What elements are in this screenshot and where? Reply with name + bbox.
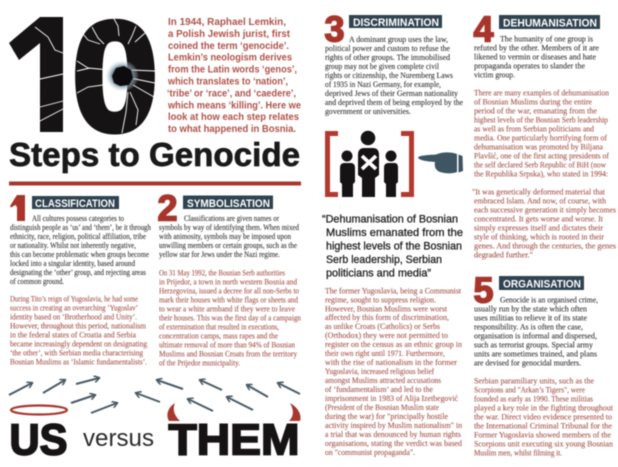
text: Bosnia context: became increasingly dependent on designating	[10, 340, 147, 348]
text: Bosnia context: Scorpions and "Arkan’s Tigers", were	[474, 385, 585, 394]
text: definition: group may not be given complete civil	[325, 62, 440, 71]
text: Bosnia context: (Orthodox) they were not permitted to	[325, 331, 448, 340]
text: Bosnia context: The former Yugoslavia, being a Communist	[325, 286, 462, 295]
text: Plavšić quote: genes. And through the centuries, the genes	[474, 241, 616, 250]
text: Plavšić quote: degraded further."	[474, 250, 533, 259]
text: Bosnia examples: the Republika Srpska), who stated in 1994:	[474, 169, 608, 178]
text: Plavšić quote: style of thinking, which is rooted in their	[474, 232, 604, 241]
intro paragraph: look at how each step relates	[168, 112, 299, 123]
big number 10 with cracks	[8, 16, 156, 136]
text: definition	[474, 295, 598, 367]
text: definition: Genocide is an organised crime,	[500, 295, 598, 304]
text: Bosnia context: success in creating an overarching ‘Yugoslav’	[10, 304, 138, 312]
text: definition: political power and custom to refuse the	[325, 44, 450, 53]
text: definition: unwilling members or certain groups, such as the	[159, 241, 297, 250]
text: Bosnia context: However, Bosnian Muslims were worst	[325, 304, 448, 313]
text: Bosnia examples: as well as from Serbian politicians and	[474, 125, 594, 134]
text: Bosnia examples: media. One particularly horrifying form of	[474, 134, 607, 143]
intro paragraph	[167, 17, 301, 135]
text: Bosnia context: of ‘fundamentalism’ and led to the	[325, 385, 433, 394]
text: definition	[474, 35, 599, 80]
text: Bosnia context: During Tito’s reign of Yugoslavia, he had some	[10, 294, 138, 304]
number 4: 4	[474, 8, 494, 50]
panel: step 5 organisation	[474, 270, 614, 457]
arrows: us versus them	[9, 378, 300, 413]
intro paragraph: a Polish Jewish jurist, first	[168, 29, 291, 40]
text: definition: likened to vermin or diseases and hate	[474, 53, 596, 62]
text: Bosnia context	[474, 376, 614, 457]
text: definition: units are sometimes trained, and plans	[474, 349, 597, 358]
text: Bosnia context: identity based on ‘Brotherhood and Unity’.	[10, 312, 137, 322]
title: Steps to Genocide	[9, 136, 300, 173]
intro paragraph: to what happened in Bosnia.	[168, 124, 296, 135]
panel: step 1 classification	[10, 188, 151, 366]
text: Plavšić quote: concentrated. It gets worse and worse. It	[474, 214, 604, 223]
text: Bosnia context: amongst Muslims attracted accusations	[325, 376, 441, 385]
intro paragraph: Lemkin’s neologism derives	[168, 53, 292, 64]
text: Bosnia examples: highest levels of the Bosnian Serb leadership	[474, 116, 608, 125]
text: Bosnia context: in the federal states of Croatia and Serbia	[10, 330, 136, 340]
text: Bosnia context: Former Yugoslavia showed members of the	[474, 430, 611, 439]
text: Bosnia context: played a key role in the fighting throughout	[474, 403, 614, 412]
text: definition: deprived Jews of their German nationality	[325, 89, 458, 98]
text: Bosnia examples: Plavšić, one of the first acting presidents of	[474, 152, 609, 161]
text: definition: uses militias to relieve it of its state	[474, 313, 587, 322]
text: definition: organisation is informal and dispersed,	[474, 331, 597, 340]
text: Prijedor: On 31 May 1992, the Bosnian Serb authorities	[159, 268, 285, 277]
text: Plavšić quote: "It was genetically deformed material that	[472, 187, 606, 196]
text: Bosnia context: ‘the other’, with Serbian media characterising	[10, 348, 143, 358]
text: Bosnia context: the war. Direct video evidence presented to	[474, 412, 612, 421]
text: Bosnia context: Serbian paramiliary units, such as the	[474, 376, 594, 385]
text: definition: responsibility. As is often the case,	[474, 322, 583, 331]
text: Prijedor: ultimate removal of more than 94% of Bosnian	[159, 340, 295, 349]
text: versus: versus	[83, 425, 154, 452]
text: Bosnia context: organisations, stating the verdict was based	[325, 439, 462, 448]
text: definition: government or universities.	[325, 107, 411, 116]
text: US: US	[10, 416, 68, 464]
text: definition: refuted by the other. Members of it are	[474, 44, 599, 53]
icon: excluded people in brackets	[328, 131, 412, 197]
heading: dehumanisation: DEHUMANISATION	[503, 18, 597, 30]
text: Prijedor: of extermination that resulted in executions,	[159, 322, 279, 331]
icon: halo	[11, 406, 67, 414]
text: Plavšić quote: simply expresses itself and dictates their	[474, 223, 603, 232]
text: definition: of 1935 in Nazi Germany, for example,	[325, 80, 441, 89]
text: Bosnia context: during the war) for "principally hostile	[325, 412, 448, 421]
text: Bosnia context: Yugoslavia, increased religious belief	[325, 367, 434, 376]
text: definition: with animosity, symbols may be imposed upon	[159, 232, 291, 241]
text: definition: locked into a singular identity, based around	[10, 259, 135, 268]
text: Bosnia examples: There are many examples of dehumanisation	[474, 89, 609, 98]
text: definition: propaganda operates to slander the	[474, 62, 585, 71]
number 5: 5	[474, 270, 494, 310]
text: Bosnia context: the International Criminal Tribunal for the	[474, 421, 612, 430]
icon: pointing hand	[418, 152, 463, 173]
text: Bosnia context: as unlike Croats (Catholics) or Serbs	[325, 322, 440, 331]
text: definition: symbols by way of identifying them. When mixed	[159, 223, 299, 232]
text: Bosnia context: imprisonment in 1983 of Alija Izetbegović	[325, 394, 458, 403]
text: Bosnia context: a trial that was denounced by human rights	[325, 430, 461, 439]
text: Plavšić quote	[472, 187, 616, 259]
text: definition: distinguish people as ‘us’ and ‘them’, be it through	[10, 223, 151, 232]
text: Bosnia context: Muslim men, whilst filming it.	[474, 448, 562, 457]
text: Prijedor: in Prijedor, a town in north western Bosnia and	[159, 277, 297, 286]
text: definition: A dominant group uses the law,	[349, 35, 448, 44]
text: Bosnia context: their own right until 1971. Furthermore,	[325, 349, 445, 358]
panel: step 3 discrimination	[322, 8, 463, 457]
text: definition: victim group.	[474, 71, 515, 80]
panel: step 4 dehumanisation	[472, 8, 616, 259]
text: Plavšić quote: embraced Islam. And now, of course, with	[474, 196, 606, 205]
title rule	[9, 182, 301, 186]
heading: symbolisation: SYMBOLISATION	[187, 198, 270, 210]
text: definition	[325, 35, 463, 116]
text: Bosnia examples: period of the war, emanating from the	[474, 107, 597, 116]
heading: organisation: ORGANISATION	[503, 278, 581, 290]
text: definition: rights or citizenship, the Nuremberg Laws	[325, 71, 453, 80]
intro paragraph: which means ‘killing’. Here we	[167, 100, 301, 111]
text: Prijedor: mark their houses with white flags or sheets and	[159, 295, 298, 304]
text: Bosnia context: on "communist propaganda".	[325, 448, 415, 457]
intro paragraph: coined the term ‘genocide’.	[168, 41, 289, 52]
pull quote: highest levels of the Bosnian	[326, 240, 462, 252]
text: Prijedor: of the Prijedor municipality.	[159, 358, 240, 367]
text: Bosnia examples	[474, 89, 609, 178]
pull quote: Muslims emanated from the	[326, 227, 463, 239]
pull quote: politicians and media”	[326, 268, 431, 280]
text: Prijedor: Herzegovina, issued a decree for all non-Serbs to	[159, 286, 299, 295]
intro paragraph: from the Latin words ‘genos’,	[168, 65, 297, 76]
text: Bosnia examples: dehumanisation was promoted by Biljana	[474, 143, 603, 152]
text: definition: of common ground.	[10, 277, 64, 286]
intro paragraph: ‘tribe’ or ‘race’, and ‘caedere’,	[167, 88, 296, 99]
text: definition: yellow star for Jews under the Nazi regime.	[159, 250, 280, 259]
heading: discrimination: DISCRIMINATION	[353, 17, 439, 29]
pull quote	[322, 214, 463, 280]
text: Bosnia examples: of Bosnian Muslims during the entire	[474, 98, 592, 107]
text: Prijedor: to wear a white armband if they were to leave	[159, 304, 295, 313]
text: definition: ethnicity, race, religion, political affiliation, tribe	[10, 232, 146, 241]
text: Bosnia context: However, throughout this period, nationalism	[10, 322, 147, 330]
text: Bosnia examples: the self declared Serb Republic of BiH (now	[474, 160, 606, 170]
text: Bosnia context: affected by this form of discrimination,	[325, 313, 449, 322]
text: Bosnia context: activity inspired by Muslim nationalism" in	[325, 421, 462, 430]
text: definition	[10, 214, 151, 286]
text: Plavšić quote: each successive generation it simply becomes	[474, 205, 616, 214]
text: Bosnia context: with the rise of nationalism in the former	[325, 358, 457, 367]
text: Bosnia context: (President of the Bosnian Muslim state	[325, 403, 439, 412]
text: Prijedor: their houses. This was the first day of a campaign	[159, 313, 301, 322]
number 1: 1	[10, 188, 31, 230]
text: definition: usually run by the state which often	[474, 304, 587, 313]
text: Bosnia context	[10, 294, 147, 366]
text: definition: designating the ‘other’ group, and rejecting areas	[10, 268, 146, 277]
text: Bosnia context: regime, sought to suppress religion.	[325, 295, 436, 304]
text: Prijedor: concentration camps, mass rapes and the	[159, 331, 278, 340]
pull quote: “Dehumanisation of Bosnian	[322, 214, 458, 226]
number 3: 3	[324, 8, 345, 50]
text: Bosnia context: Scorpions unit executing six young Bosnian	[474, 439, 613, 448]
text: Prijedor	[159, 268, 301, 367]
text: Bosnia context: Bosnian Muslims as ‘Islamic fundamentalists’.	[10, 358, 147, 366]
text: definition: The humanity of one group is	[500, 35, 593, 44]
text: Prijedor: Muslims and Bosnian Croats from the territory	[159, 349, 297, 358]
number 2: 2	[158, 188, 178, 228]
text: definition: and deprived them of being employed by the	[325, 98, 463, 107]
text: Bosnia context: founded as early as 1990. These militias	[474, 394, 593, 403]
text: definition: this can become problematic when groups become	[10, 250, 149, 259]
text: Bosnia context: register on the census as an ethnic group in	[325, 340, 462, 349]
text: definition: Classifications are given names or	[184, 214, 279, 223]
intro paragraph: In 1944, Raphael Lemkin,	[168, 17, 286, 28]
intro paragraph: which translates to ‘nation’,	[167, 76, 288, 88]
text: THEM: THEM	[168, 416, 300, 464]
text: definition: are devised for genocidal murders.	[474, 358, 581, 367]
text: definition: rights of other groups. The immobilised	[325, 53, 450, 62]
icon: devil horns	[167, 403, 301, 421]
text: definition: All cultures possess categories to	[32, 214, 124, 223]
heading: classification: CLASSIFICATION	[35, 198, 115, 210]
text: definition	[159, 214, 299, 259]
text: definition: such as terrorist groups. Special army	[474, 340, 593, 349]
text: definition: or nationality. Whilst not inherently negative,	[10, 241, 136, 250]
pull quote: Serb leadership, Serbian	[326, 254, 442, 266]
text: Bosnia context	[325, 286, 462, 457]
panel: step 2 symbolisation	[158, 188, 301, 367]
